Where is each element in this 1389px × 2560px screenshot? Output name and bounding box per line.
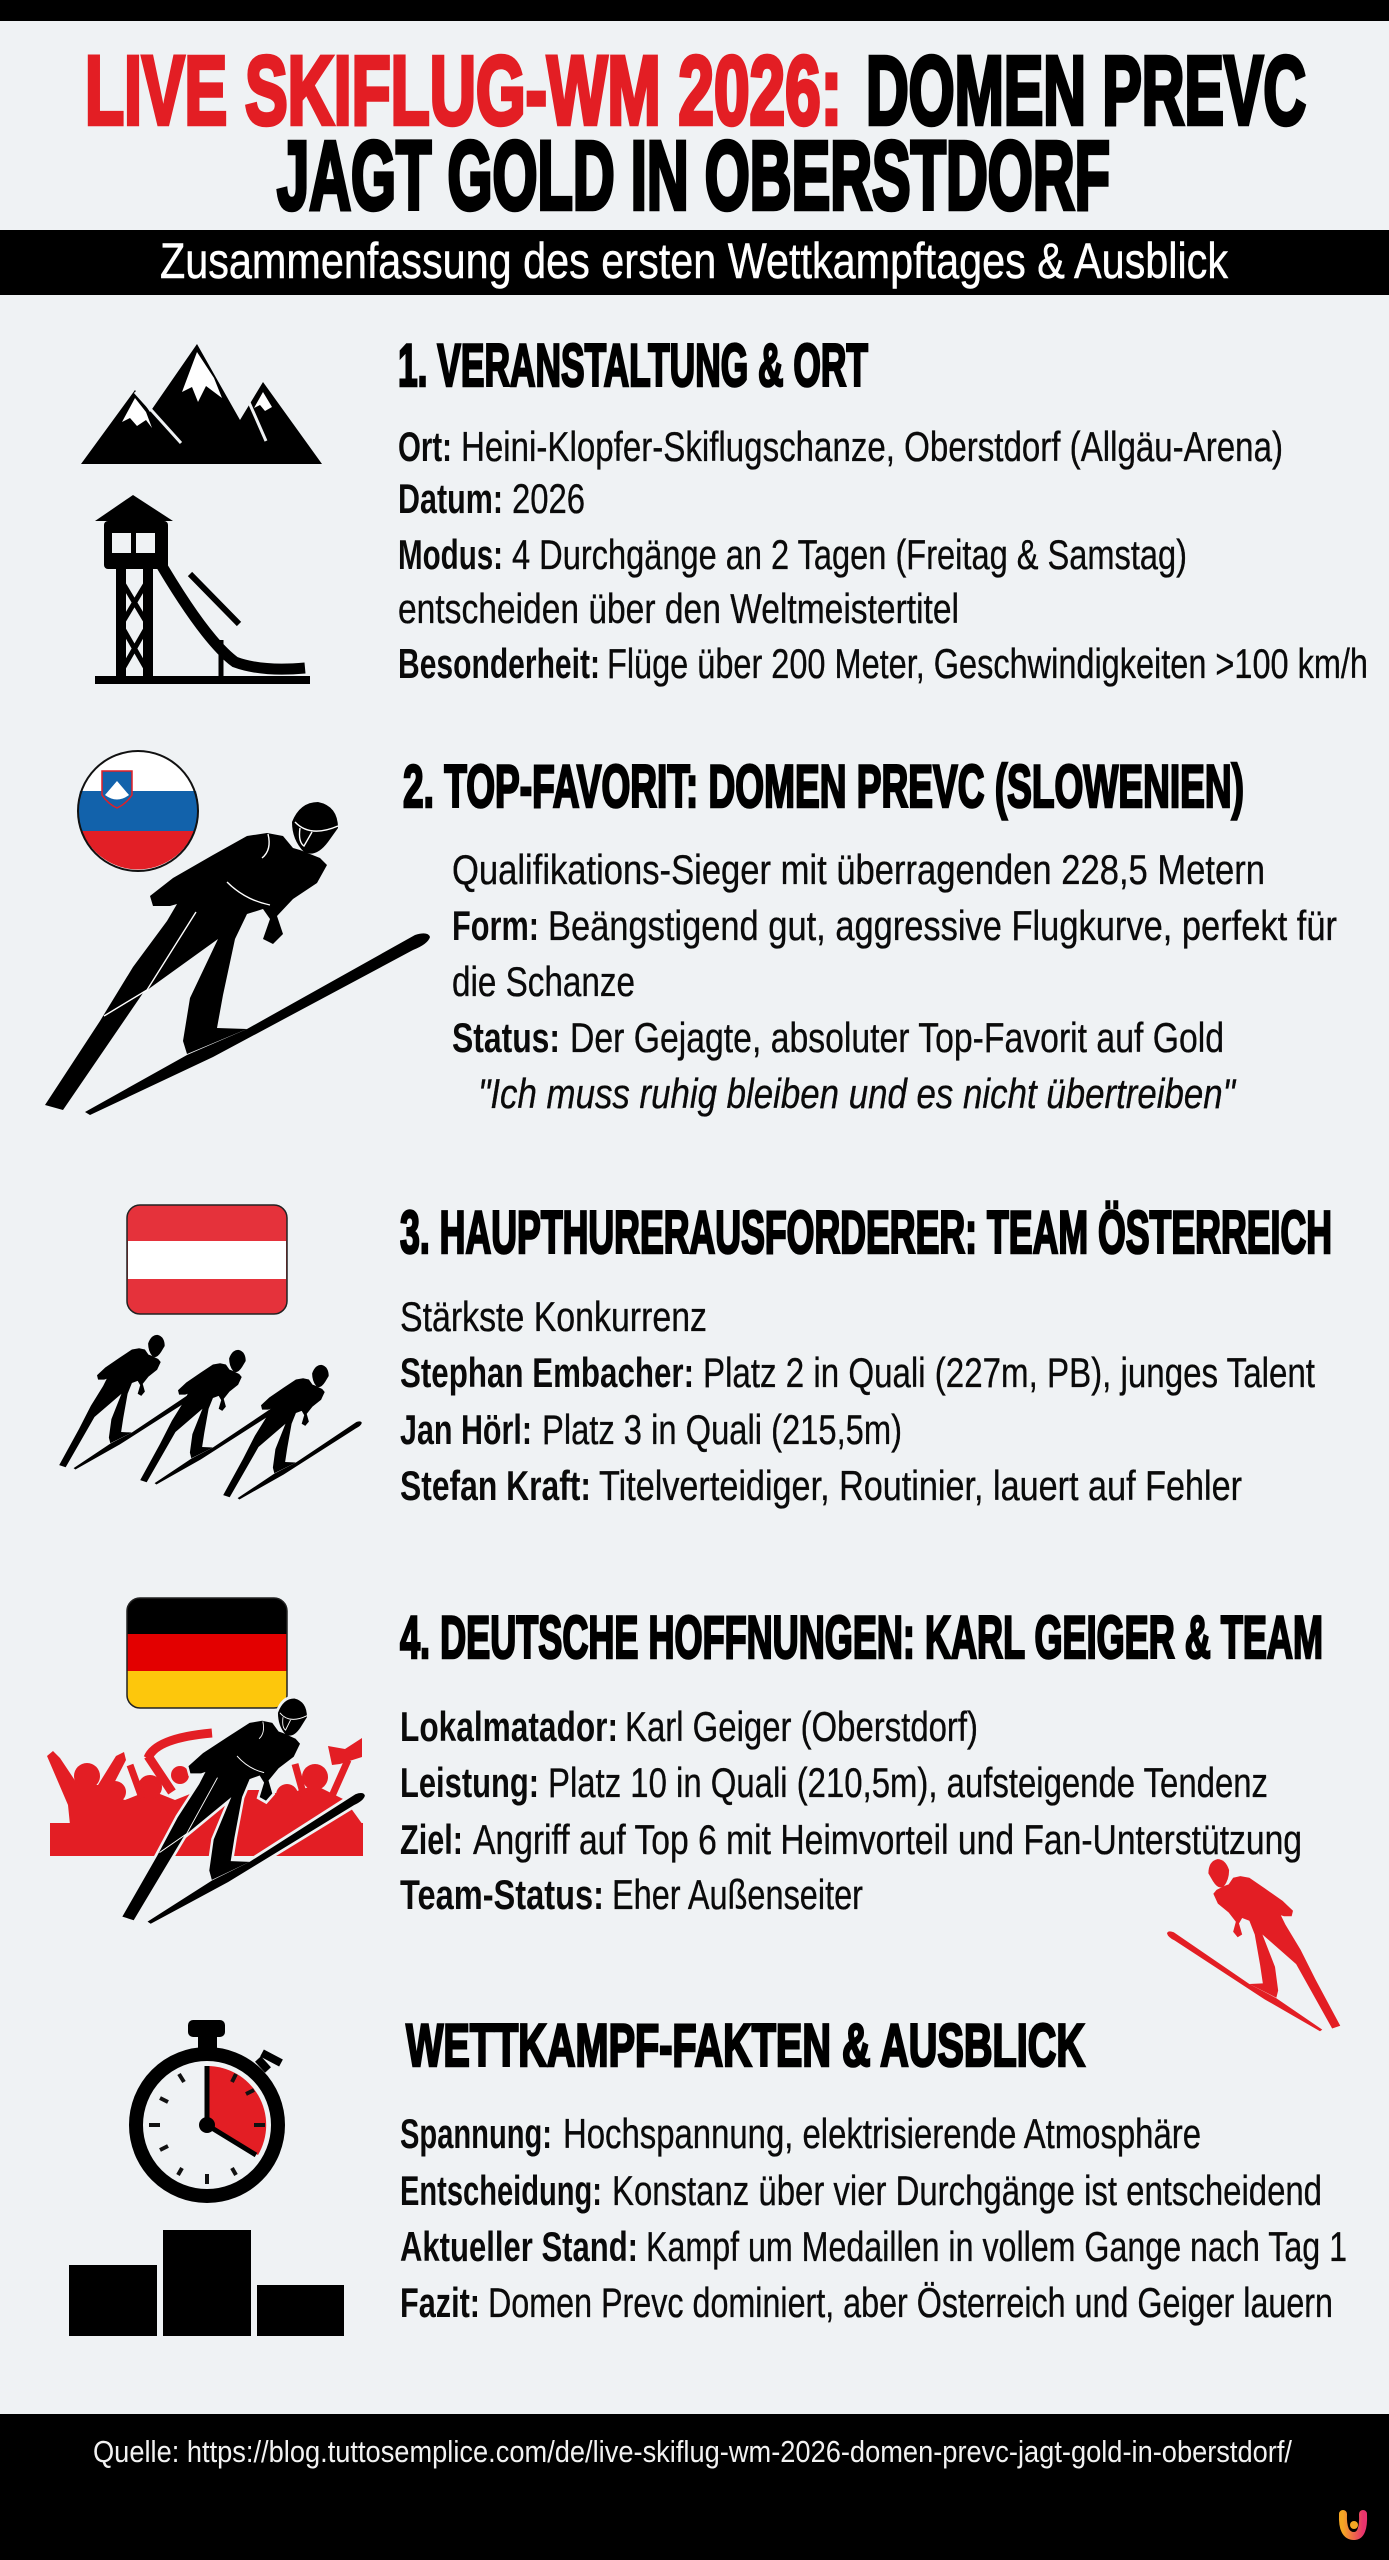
text block: Titelverteidiger, Routinier, lauert auf Fehler [599,1462,1242,1509]
icon: podium [69,2230,344,2336]
text block: Der Gejagte, absoluter Top-Favorit auf Gold [570,1014,1224,1061]
text block: Stärkste Konkurrenz [400,1293,707,1340]
panel: Veranstaltung und Ort [81,332,1368,687]
text block: Modus: [398,531,503,578]
text block: Lokalmatador: [400,1703,618,1750]
text block [400,2110,1347,2326]
icon: ski jumper [45,802,430,1115]
text block: 2026 [512,475,585,522]
text block: Besonderheit: [398,640,600,687]
text block: Ziel: [400,1816,463,1863]
text block: Stephan Embacher: [400,1349,694,1396]
text block: 4 Durchgänge an 2 Tagen (Freitag & Samstag) [512,531,1187,578]
title [85,36,1306,230]
top bar [0,0,1389,21]
text block: Leistung: [400,1759,539,1806]
text block [398,423,1368,687]
text block: Spannung: [400,2110,552,2157]
footer band [0,2414,1389,2560]
text block [400,1293,1315,1509]
icon: German ski jumper [122,1698,365,1924]
icon: German flag [127,1598,287,1708]
text block: Fazit: [400,2279,480,2326]
icon: logo [1343,2514,1363,2536]
panel: Deutsche Hoffnungen [47,1598,1340,2031]
text block: Eher Außenseiter [612,1871,863,1918]
panel: Top-Favorit [45,751,1337,1117]
text block [452,846,1337,1117]
text block: Karl Geiger (Oberstdorf) [625,1703,978,1750]
text block: Stefan Kraft: [400,1462,591,1509]
text block: entscheiden über den Weltmeistertitel [398,585,959,632]
text block: Team-Status: [400,1871,604,1918]
text block: Form: [452,902,539,949]
text block: die Schanze [452,958,635,1005]
text block: Jan Hörl: [400,1406,532,1453]
icon: mountains [81,344,322,464]
text block: Ort: [398,423,452,470]
panel: Hauptherausforderer [59,1199,1332,1509]
text block: "Ich muss ruhig bleiben und es nicht übertreiben" [478,1070,1237,1117]
icon: Slovenian flag [78,751,198,871]
title: LIVE SKIFLUG-WM 2026: [85,36,842,145]
text block: Entscheidung: [400,2167,602,2214]
heading: 1. VERANSTALTUNG & ORT [398,332,868,399]
panel: Wettkampf-Fakten [69,2012,1347,2336]
text block: Platz 3 in Quali (215,5m) [542,1406,902,1453]
icon: cheering crowd [47,1733,363,1856]
icon: three ski jumpers [59,1335,362,1499]
icon: ski jump tower [95,495,310,684]
icon: stopwatch [136,2020,281,2196]
text block: Datum: [398,475,503,522]
text block: Hochspannung, elektrisierende Atmosphäre [563,2110,1201,2157]
icon: Austrian flag [127,1205,287,1314]
icon: red ski jumper [1167,1859,1340,2031]
text block: Status: [452,1014,560,1061]
text block [400,1703,1302,1918]
text block: Aktueller Stand: [400,2223,638,2270]
